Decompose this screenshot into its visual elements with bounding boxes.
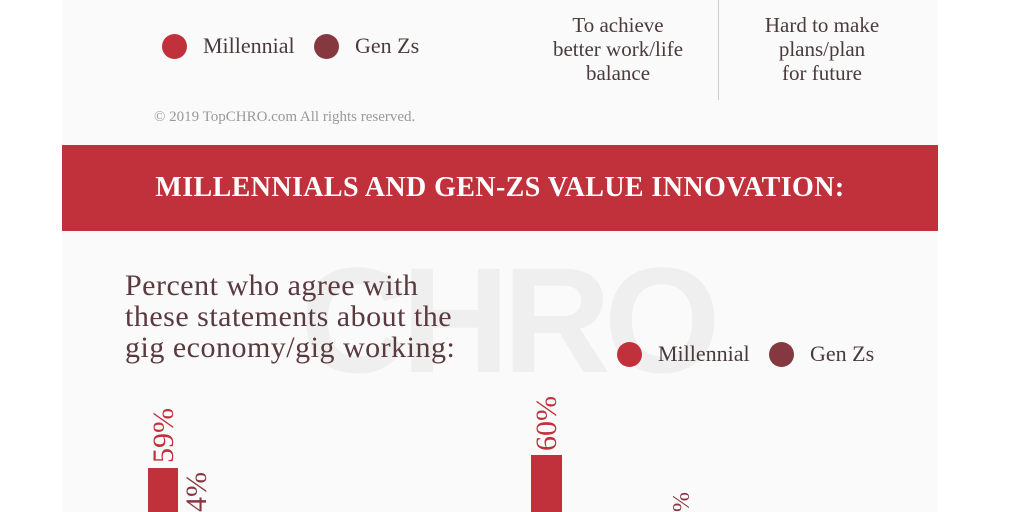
banner: MILLENNIALS AND GEN-ZS VALUE INNOVATION: (155, 172, 845, 203)
section subtitle: gig economy/gig working: (125, 331, 455, 364)
column label: work/life: better work/life (553, 37, 683, 61)
column label: plans: plans/plan (779, 37, 865, 61)
divider line (718, 0, 719, 100)
bar chart (147, 396, 695, 512)
section subtitle: these statements about the (125, 300, 452, 333)
section subtitle (125, 269, 455, 364)
bar 60% (530, 396, 563, 512)
legend lower: Millennial (658, 341, 750, 366)
label 54% (partial): 4% (180, 472, 213, 512)
partial label: % (669, 492, 695, 512)
bar 59%: 59% (147, 408, 180, 463)
legend: millennial (162, 34, 187, 59)
section subtitle: Percent who agree with (125, 269, 418, 302)
column label: work/life: balance (586, 61, 650, 85)
legend lower: Gen Zs (810, 341, 874, 366)
column label: plans: for future (782, 61, 862, 85)
legend top (162, 33, 419, 59)
legend top: Millennial (203, 33, 295, 58)
watermark: CHRO (300, 236, 714, 404)
column label: work/life: To achieve (572, 13, 664, 37)
bar 60%: 60% (530, 396, 563, 451)
column label: plans: Hard to make (765, 13, 879, 37)
legend lower (617, 341, 874, 367)
legend: gen z (314, 34, 339, 59)
banner (62, 145, 938, 231)
bar 59% (147, 408, 180, 512)
column label: plans (765, 13, 879, 85)
legend top: Gen Zs (355, 33, 419, 58)
column label: work/life (553, 13, 683, 85)
copyright: © 2019 TopCHRO.com All rights reserved. (154, 109, 415, 125)
